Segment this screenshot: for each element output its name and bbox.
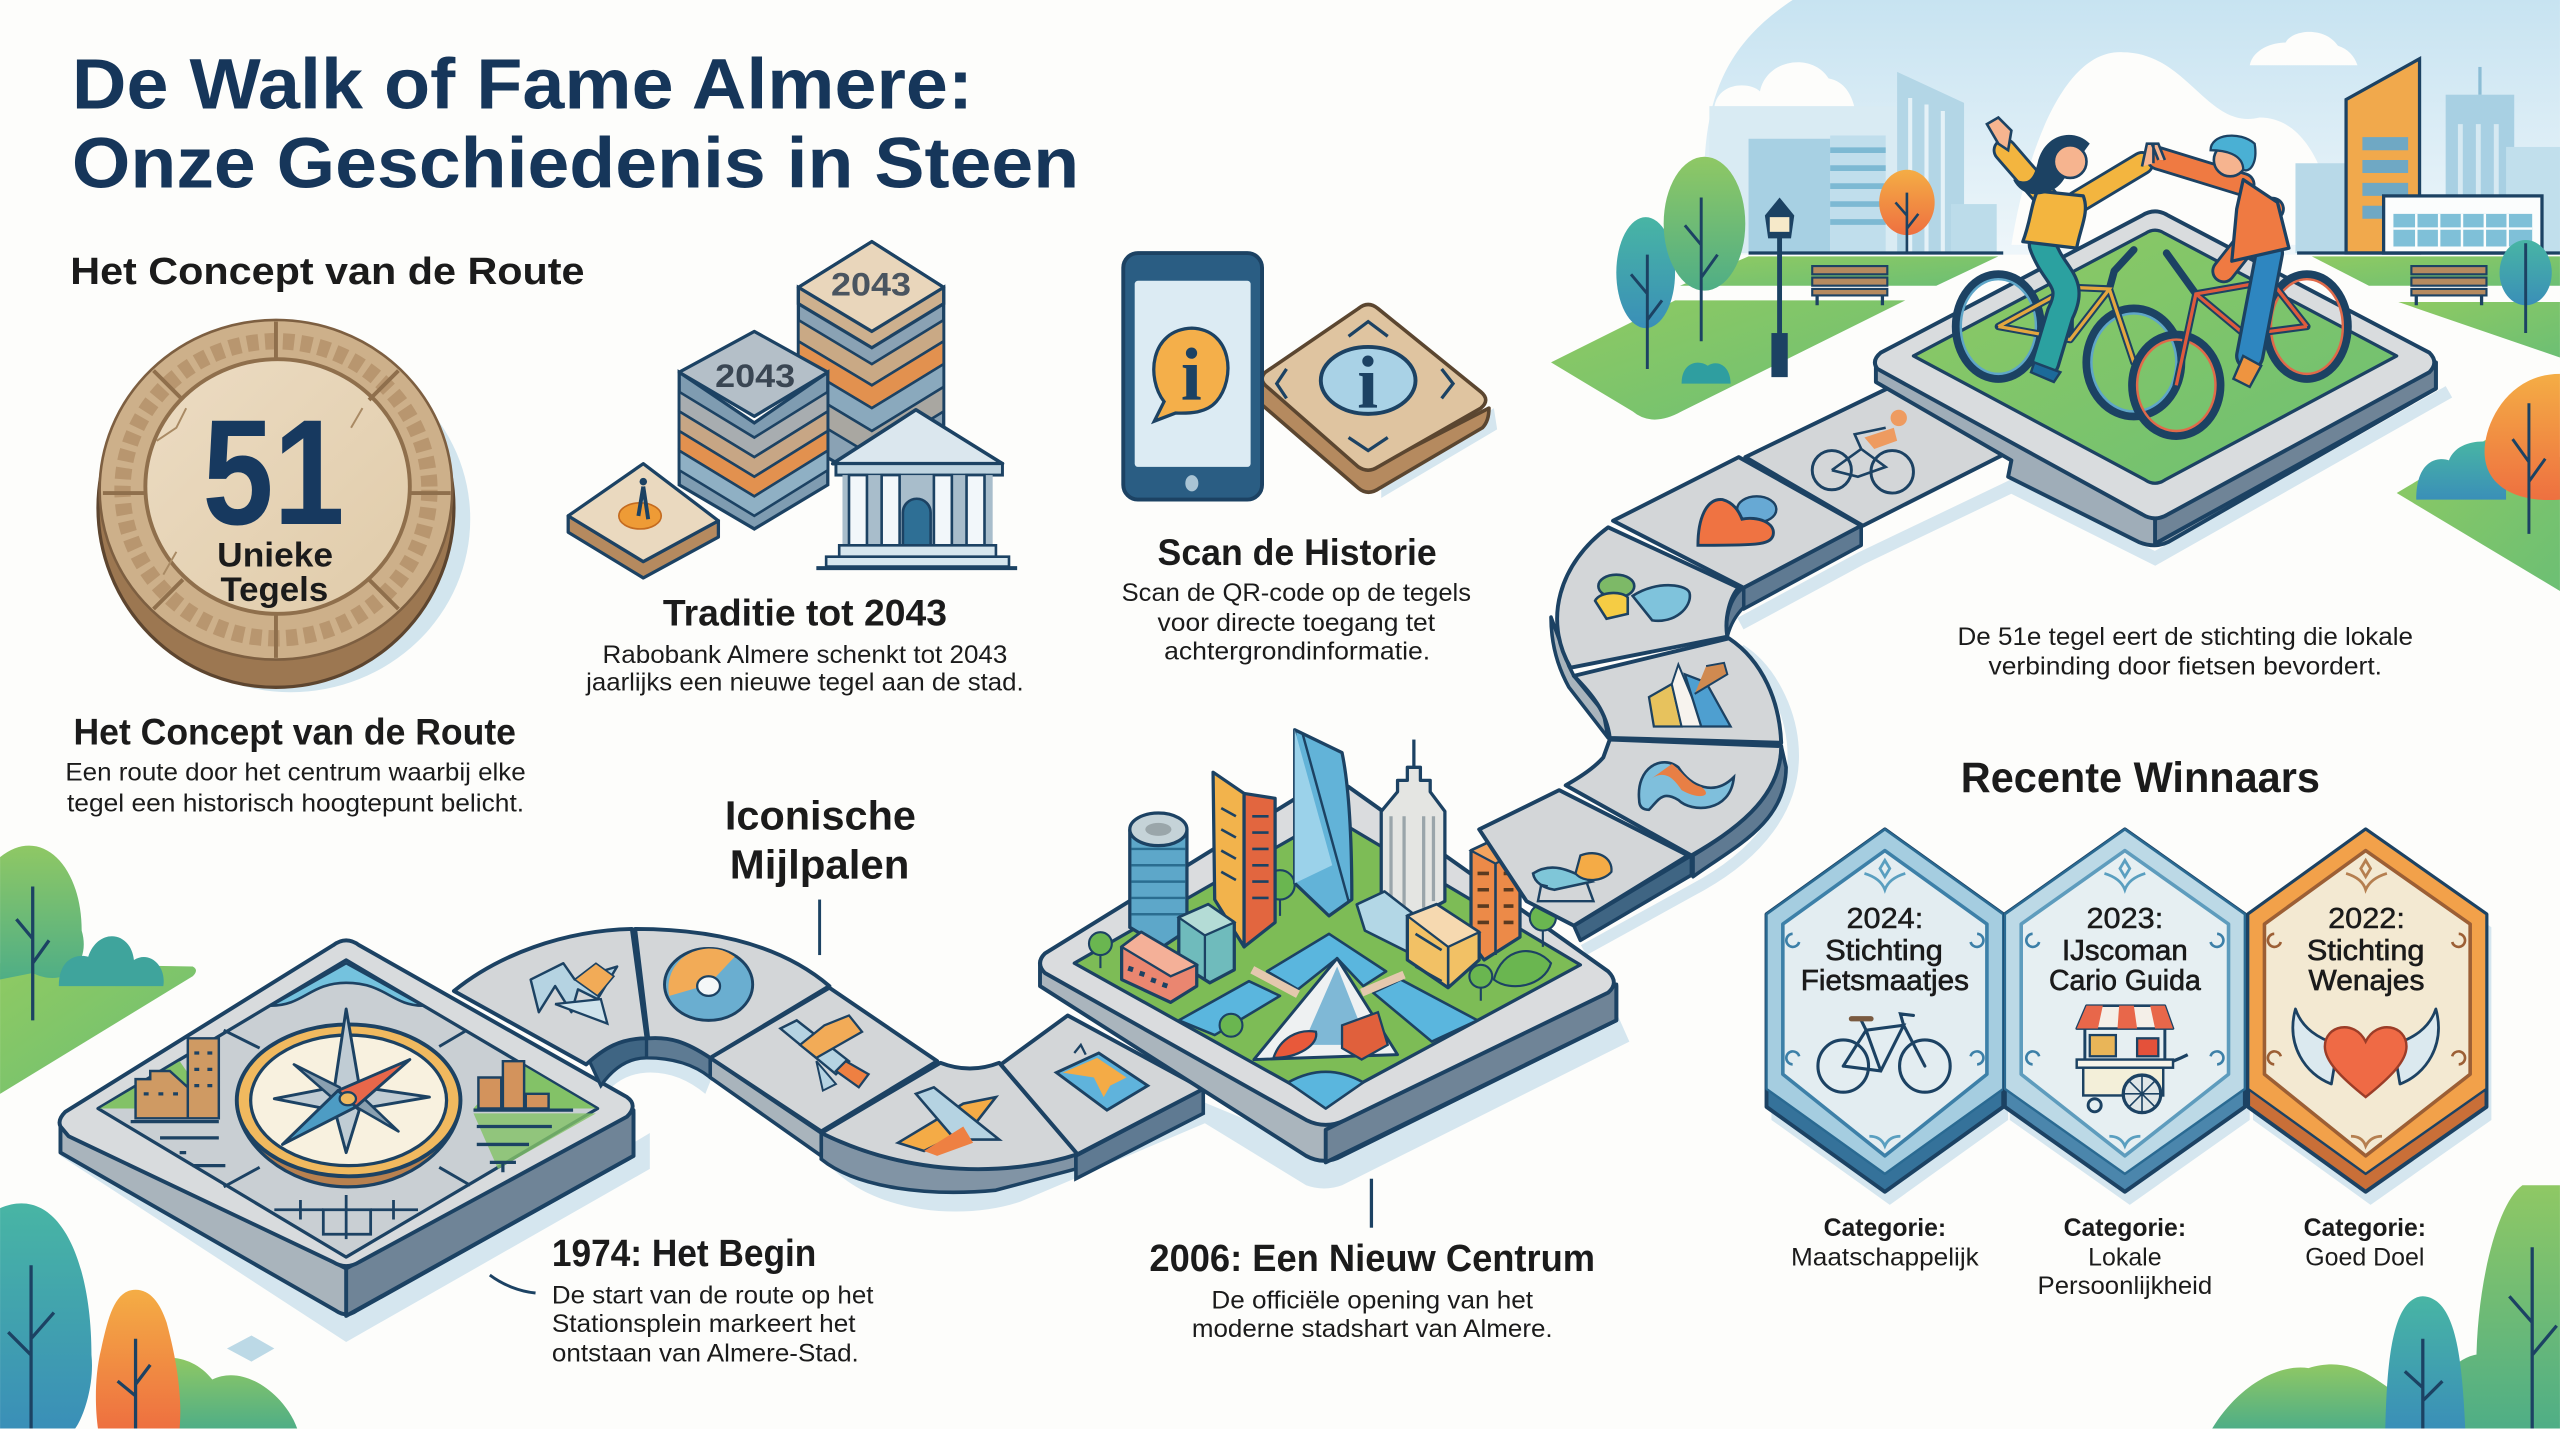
text block: 2006: 2006: Een Nieuw Centrum <box>1149 1237 1595 1279</box>
chat bubble info: i <box>1181 334 1202 417</box>
route tiles 1974 to 2006 <box>454 929 1203 1192</box>
winner text 2023 <box>2049 903 2201 997</box>
text block: 1974: 1974: Het Begin <box>552 1232 816 1274</box>
tile: crossed pens icon <box>821 1063 1078 1169</box>
route tiles 2006 to cycling platform <box>1479 389 2008 940</box>
platform: cycling park <box>1875 118 2436 545</box>
winner text 2022: 2022: <box>2328 903 2405 935</box>
text block: 2006: De officiële opening van het <box>1211 1287 1533 1315</box>
icon: tile with info symbol: i <box>1357 342 1378 425</box>
building: orange low <box>1407 904 1479 988</box>
winner text 2022: Stichting <box>2307 935 2424 967</box>
winner text 2023: IJscoman <box>2062 935 2188 967</box>
caption on coin <box>217 537 333 609</box>
back stack: 2043 <box>831 265 911 302</box>
text block: 1974: Stationsplein markeert het <box>552 1310 856 1338</box>
compass <box>237 1009 460 1187</box>
tile side faces <box>589 1035 647 1086</box>
decorative trees bottom right <box>2212 1185 2560 1429</box>
text block: concept: Het Concept van de Route <box>74 711 516 752</box>
winner text 2023: 2023: <box>2086 903 2163 935</box>
icon: food cart <box>2077 1006 2188 1113</box>
icon: phone <box>1123 253 1262 500</box>
platform: compass start 1974 <box>60 940 633 1316</box>
text block: traditie: Traditie tot 2043 <box>663 592 947 633</box>
text block: traditie <box>585 592 1024 697</box>
text block: 51e tegel: verbinding door fietsen bevordert. <box>1989 652 2382 680</box>
winner text 2024: Stichting <box>1825 935 1943 967</box>
tower: cylinder <box>1130 813 1187 947</box>
winner text 2024 <box>1801 903 1969 997</box>
caption: categorie lokale persoonlijkheid <box>2038 1214 2212 1300</box>
icon: bicycle <box>1818 1014 1950 1092</box>
text block: traditie: jaarlijks een nieuwe tegel aan de stad. <box>585 669 1024 697</box>
building: teal <box>1179 904 1234 983</box>
text block: scan de historie: voor directe toegang tet <box>1158 609 1435 637</box>
text block: scan de historie: Scan de QR-code op de tegels <box>1122 579 1471 607</box>
leader line: mijlpalen <box>819 900 821 955</box>
text block: 2006 <box>1149 1237 1595 1343</box>
icon: stacked tiles and town hall <box>568 242 1017 578</box>
back stack <box>798 242 944 483</box>
panel: winner 2023 <box>2005 829 2250 1205</box>
icon: tile with info symbol <box>1262 304 1497 498</box>
lawns <box>1551 256 2560 591</box>
leader line: 2006 <box>1370 1179 1372 1228</box>
building: orange right <box>1471 839 1520 960</box>
skyline park background <box>1551 0 2560 591</box>
water panels <box>1179 934 1478 1109</box>
title: De Walk of Fame Almere: <box>72 45 973 125</box>
clouds <box>1714 32 2358 245</box>
icon: stone coin 51 unieke tegels <box>98 320 470 692</box>
tile: building icon <box>1574 638 1781 743</box>
heading: recente winnaars: Recente Winnaars <box>1961 754 2320 801</box>
man on bike <box>2132 136 2348 436</box>
tile: vinyl icon <box>635 929 829 1058</box>
caption: categorie goed doel: Goed Doel <box>2305 1243 2424 1271</box>
panel: winner 2022 <box>2248 829 2491 1205</box>
number 51: 51 <box>202 388 345 556</box>
woman on bike <box>1956 118 2181 416</box>
winner text 2024: Fietsmaatjes <box>1801 965 1969 997</box>
tile: wave icon <box>1566 740 1781 855</box>
text block: scan de historie: achtergrondinformatie. <box>1164 638 1430 666</box>
tile: flag icon <box>1001 1015 1203 1154</box>
text block: 51e tegel: De 51e tegel eert de stichting die lokale <box>1958 623 2413 651</box>
text block: traditie: Rabobank Almere schenkt tot 2043 <box>602 641 1007 669</box>
caption: categorie maatschappelijk <box>1791 1214 1979 1271</box>
sky <box>1704 0 2560 255</box>
heading: iconische mijlpalen: Mijlpalen <box>730 841 909 887</box>
winner text 2024: 2024: <box>1847 903 1923 935</box>
building: red <box>1122 932 1197 1002</box>
front stack: 2043 <box>715 357 795 394</box>
caption on coin: Tegels <box>220 571 328 609</box>
caption: categorie maatschappelijk: Categorie: <box>1824 1214 1946 1242</box>
tower: orange <box>1213 772 1275 947</box>
map: city right <box>474 1061 573 1172</box>
text block: 2006: moderne stadshart van Almere. <box>1192 1315 1553 1343</box>
text block: 51e tegel <box>1958 623 2413 680</box>
pyramid landmark <box>1254 958 1398 1060</box>
small tile <box>568 464 718 578</box>
tile: cross icon <box>710 988 937 1131</box>
tile: map icon <box>454 929 647 1064</box>
caption: categorie lokale persoonlijkheid: Categorie: <box>2064 1214 2186 1242</box>
small trees <box>1089 870 1556 1037</box>
tile: lake icon <box>1557 527 1739 668</box>
text block: 1974: ontstaan van Almere-Stad. <box>552 1340 859 1368</box>
shadow under route <box>60 392 2449 1342</box>
text block: scan de historie: Scan de Historie <box>1158 532 1437 573</box>
tower: grey skyscraper <box>1381 740 1445 918</box>
map: plan bottom <box>274 1195 418 1239</box>
tower: glass <box>1295 730 1352 916</box>
tile: cycling icon <box>1745 389 2008 526</box>
benches <box>1812 266 2486 305</box>
chat bubble info <box>1154 328 1228 421</box>
text block: 1974 <box>552 1232 873 1368</box>
skyline buildings <box>1709 59 2560 253</box>
title: Onze Geschiedenis in Steen <box>72 124 1079 204</box>
caption: categorie lokale persoonlijkheid: Persoonlijkheid <box>2038 1272 2212 1300</box>
caption on coin: Unieke <box>217 537 333 575</box>
text block: scan de historie <box>1122 532 1471 666</box>
caption: categorie goed doel: Categorie: <box>2304 1214 2426 1242</box>
map: city left <box>131 1038 225 1166</box>
town hall <box>816 410 1017 568</box>
platform: city centre 2006 <box>1040 730 1616 1162</box>
tile: heart icon <box>1613 457 1861 588</box>
tile: boat icon <box>1479 790 1688 926</box>
panel: winner 2024 <box>1767 829 2008 1205</box>
heading: iconische mijlpalen <box>725 792 916 887</box>
building: blue low <box>1357 891 1414 955</box>
text block: concept: Een route door het centrum waarbij elke <box>65 758 526 786</box>
winner text 2022: Wenajes <box>2309 965 2424 997</box>
winner text 2023: Cario Guida <box>2049 965 2201 997</box>
title <box>72 45 1079 204</box>
park trees <box>1616 157 2560 534</box>
caption: categorie maatschappelijk: Maatschappelijk <box>1791 1243 1979 1271</box>
text block: 1974: De start van de route op het <box>552 1282 873 1310</box>
caption: categorie lokale persoonlijkheid: Lokale <box>2088 1243 2162 1271</box>
decorative trees bottom left <box>0 846 297 1429</box>
heading: concept: Het Concept van de Route <box>70 250 585 292</box>
leader line: 1974 <box>490 1275 536 1293</box>
front stack <box>679 331 828 529</box>
text block: concept: tegel een historisch hoogtepunt belicht. <box>67 789 524 817</box>
winner text 2022 <box>2307 903 2424 997</box>
text block: concept <box>65 711 526 817</box>
lamp post <box>1765 198 1794 377</box>
icon: winged heart <box>2293 1009 2438 1097</box>
caption: categorie goed doel <box>2304 1214 2426 1271</box>
heading: iconische mijlpalen: Iconische <box>725 792 916 838</box>
